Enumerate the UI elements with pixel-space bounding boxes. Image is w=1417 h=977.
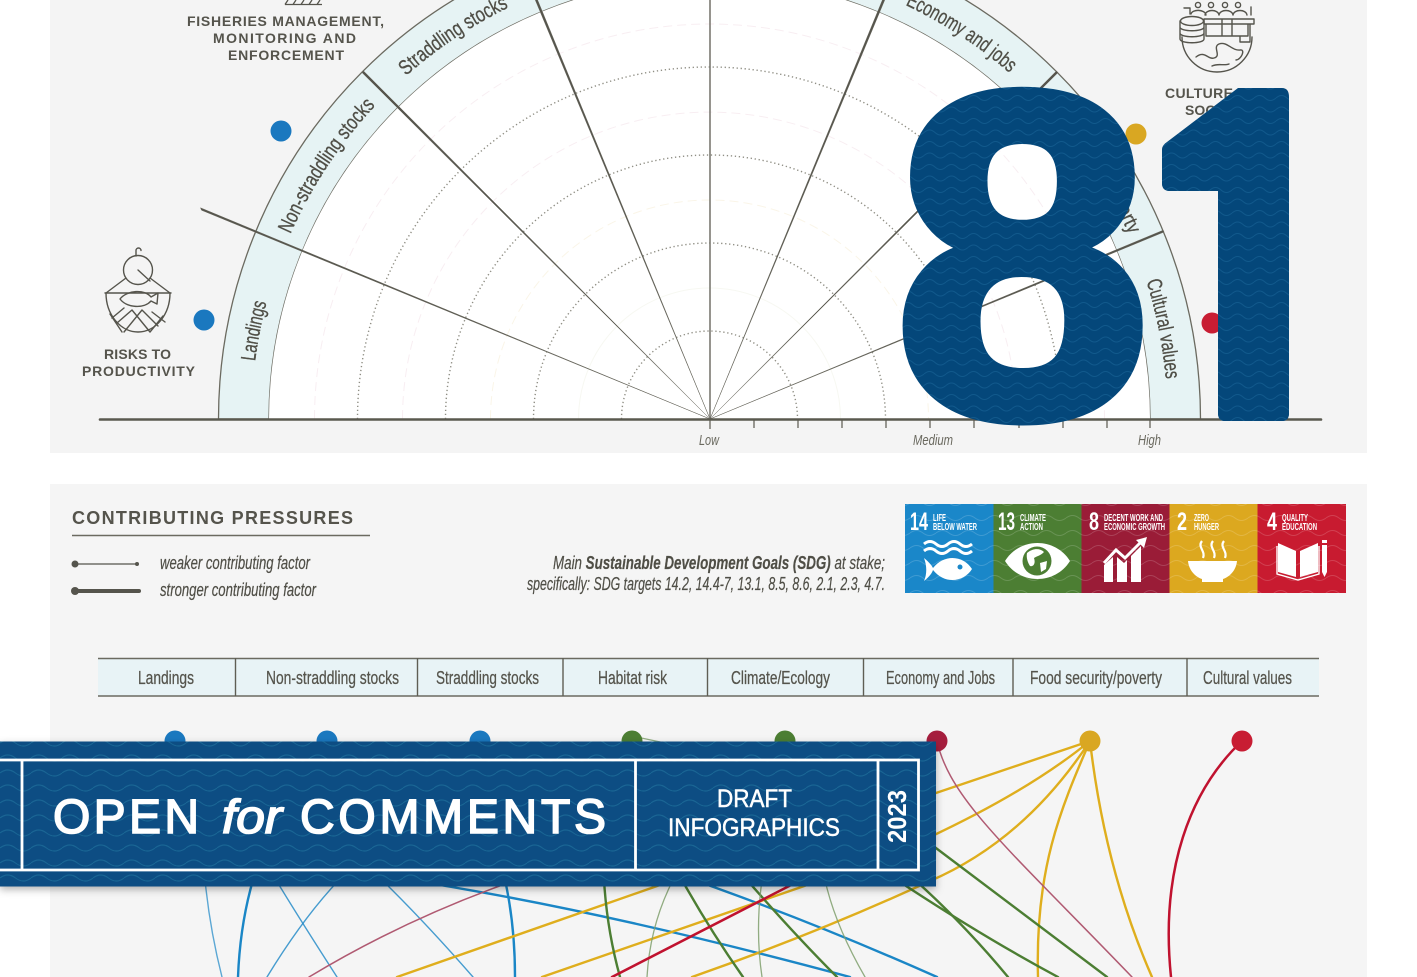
sdg tile 13: climate action [994, 504, 1082, 593]
band labels: Food security/poverty [1122, 208, 1139, 232]
banner title: OPEN [53, 791, 199, 844]
sector spokes [200, 0, 1164, 419]
banner title [53, 790, 606, 844]
table header: pressure categories: Non-straddling stocks [266, 668, 399, 688]
pale green links [632, 736, 865, 977]
icon: culture and society, globe with books and people [1180, 2, 1254, 72]
sdg tile 8: decent work and economic growth [1082, 504, 1170, 593]
sdg tile 4: quality education: 4 [1267, 508, 1277, 536]
heading: culture and society: CULTURE AND [1165, 85, 1268, 101]
inner white semicircle [269, 0, 1150, 419]
banner title: for [222, 790, 285, 843]
maroon links [309, 741, 1132, 977]
sdg tile 13: climate action: CLIMATE [1020, 513, 1046, 524]
table header: pressure categories: Straddling stocks [436, 668, 539, 688]
band labels: Cultural values [1148, 279, 1178, 378]
axis label: medium: Medium [913, 432, 953, 449]
sdg tile 2: zero hunger: 2 [1177, 508, 1187, 536]
sdg tile 8: decent work and economic growth: 8 [1089, 508, 1099, 536]
table header: pressure categories: Habitat risk [598, 668, 668, 688]
sdg tile 4: quality education: QUALITY [1282, 513, 1308, 524]
icon: fisheries management, cropped at top [285, 0, 322, 4]
banner year: 2023 [882, 790, 912, 843]
axis label: low: Low [699, 432, 720, 449]
big number 81 [902, 86, 1289, 426]
heading: fisheries management: FISHERIES MANAGEMENT, [187, 13, 384, 29]
panel: contributing pressures [50, 484, 1367, 977]
heading: culture and society [1165, 85, 1268, 118]
sdg tile 13: climate action: ACTION [1020, 522, 1043, 533]
heading rule [72, 534, 370, 536]
legend: stronger factor: stronger contributing factor [160, 580, 317, 600]
table header: pressure categories [98, 658, 1319, 696]
banner white frame [0, 760, 918, 870]
banner title: COMMENTS [300, 791, 606, 844]
table header: pressure categories: Food security/poverty [1030, 668, 1162, 688]
heading: contributing pressures: CONTRIBUTING PRESSURES [72, 508, 353, 528]
sector dots [194, 0, 1222, 334]
sdg tile 14: life below water: 14 [910, 508, 928, 536]
panel background [50, 0, 1367, 453]
sdg tile 4: quality education: EDUCATION [1282, 522, 1317, 533]
blue links [205, 880, 937, 977]
axis ticks [710, 419, 1150, 429]
table header: pressure categories: Landings [138, 668, 194, 688]
sdg tile 4: quality education [1258, 504, 1346, 593]
table header: pressure categories: Cultural values [1203, 668, 1292, 688]
sdg tile 2: zero hunger: ZERO [1194, 513, 1209, 524]
sdg description [527, 553, 885, 594]
digit 1: 1 [1125, 0, 1386, 521]
sdg tile 14: life below water: BELOW WATER [933, 522, 977, 533]
sdg tile 8: decent work and economic growth: DECENT WORK AND [1104, 513, 1163, 524]
heading: culture and society: SOCIETY [1185, 102, 1248, 118]
gold links [397, 741, 1152, 977]
red links [612, 741, 1242, 977]
band labels: Non-straddling stocks [278, 100, 374, 234]
green links [604, 836, 1107, 977]
sdg description: Main Sustainable Development Goals (SDG) at stake; [553, 553, 885, 573]
panel background [50, 484, 1367, 977]
heading: risks to productivity: RISKS TO [104, 346, 171, 362]
legend: weaker factor [72, 553, 311, 573]
axis label: high: High [1138, 432, 1161, 449]
concentric scale rings [314, 24, 1104, 419]
table header: pressure categories: Climate/Ecology [731, 668, 830, 688]
banner background [0, 742, 936, 886]
banner subtitle: DRAFT [717, 785, 792, 813]
banner subtitle [668, 785, 840, 842]
baseline axis [100, 418, 1321, 421]
heading: fisheries management [187, 13, 384, 63]
band labels [240, 0, 1178, 378]
banner subtitle: INFOGRAPHICS [668, 814, 840, 842]
heading: fisheries management: MONITORING AND [213, 30, 356, 46]
network links [205, 736, 1242, 977]
category nodes [164, 730, 1252, 752]
table header: pressure categories: Economy and Jobs [886, 668, 995, 688]
heading: risks to productivity [82, 346, 196, 379]
band labels: Landings [240, 301, 268, 360]
sdg tile 2: zero hunger [1170, 504, 1258, 593]
sdg tile 8: decent work and economic growth: ECONOMIC GROWTH [1104, 522, 1165, 533]
heading: risks to productivity: PRODUCTIVITY [82, 363, 196, 379]
sdg tile 14: life below water [905, 504, 994, 593]
legend: weaker factor: weaker contributing factor [160, 553, 311, 573]
sdg tile 13: climate action: 13 [998, 508, 1015, 536]
sdg description: specifically: SDG targets 14.2, 14.4-7, 13.1, 8.5, 8.6, 2.1, 2.3, 4.7. [527, 574, 885, 594]
outer label band [218, 0, 1200, 419]
digit 8: 8 [894, 0, 1150, 512]
legend: stronger factor [71, 580, 317, 600]
banner: open for comments [0, 742, 936, 886]
panel: radial risk chart [50, 0, 1367, 453]
sdg tile 2: zero hunger: HUNGER [1194, 522, 1219, 533]
heading: fisheries management: ENFORCEMENT [228, 47, 344, 63]
sdg tile 14: life below water: LIFE [933, 513, 946, 524]
icon: risks to productivity, fish in net [105, 248, 171, 332]
